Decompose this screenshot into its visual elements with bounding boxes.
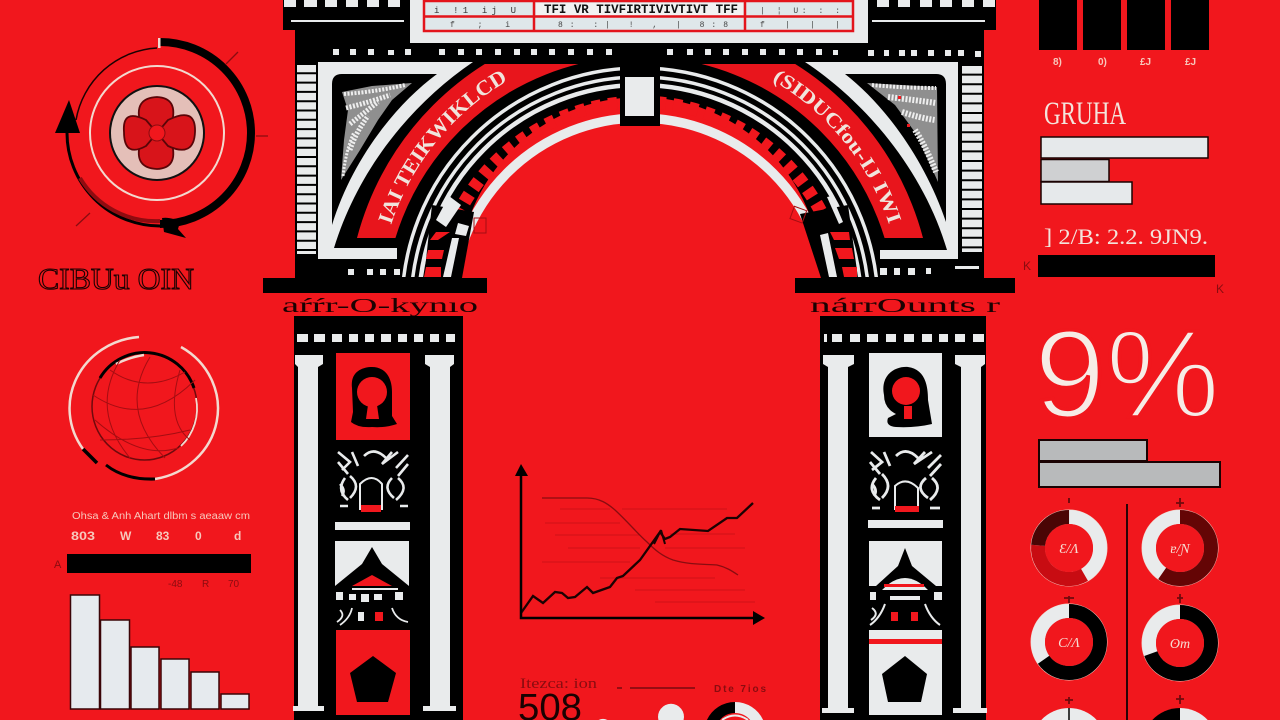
keystone	[620, 66, 660, 126]
donut 4: ʘm	[1170, 637, 1190, 652]
donut 2	[1142, 498, 1218, 586]
black scale bar	[67, 554, 251, 573]
bar axis marks	[54, 559, 240, 590]
panel: ornament right	[870, 451, 941, 512]
inscription table	[410, 0, 868, 43]
columns left	[293, 355, 456, 711]
attic crenels left	[284, 0, 404, 22]
scale labels	[71, 529, 241, 543]
tick marks: K	[1216, 282, 1224, 296]
grey comparison bars	[1039, 440, 1220, 487]
inscription table: f ; i	[450, 21, 510, 30]
tick marks	[76, 52, 268, 226]
pier inscription left: aŕŕr-O-kynıo	[282, 295, 478, 317]
panel caption: ] 2/B: 2.2. 9JN9.	[1044, 224, 1208, 249]
descending bar chart	[70, 595, 249, 709]
white band left	[335, 522, 410, 530]
bottom center stats	[518, 676, 766, 720]
bar axis marks: A	[54, 559, 62, 571]
black bar	[1038, 255, 1215, 277]
scale labels: 803	[71, 529, 95, 543]
scale labels: W	[120, 529, 132, 543]
scale labels: d	[234, 529, 241, 543]
panel: ornament left	[338, 451, 408, 512]
cycle diagram	[38, 38, 268, 296]
arch break blocks right	[790, 196, 858, 278]
right stripe column	[962, 66, 982, 252]
pier inscription right: nárrOunts r	[810, 295, 1001, 317]
panel: portrait left	[336, 353, 410, 440]
white band right	[868, 520, 943, 528]
tick marks	[1023, 259, 1224, 296]
left pier	[282, 295, 478, 720]
panel: temple right	[869, 541, 942, 630]
bar labels	[1053, 57, 1196, 68]
globe diagram	[54, 337, 251, 709]
stat label: Itezca: ion	[520, 676, 598, 692]
donut 6	[1152, 695, 1208, 720]
arch body	[263, 0, 1015, 293]
curved band inscription right: (SIDUCfou-IJ IWI	[774, 72, 902, 224]
panel: temple left	[335, 541, 409, 628]
right spandrel	[805, 62, 958, 259]
leader label: Dte 7ios	[714, 684, 766, 695]
rising data line	[521, 503, 753, 613]
chart grid lines	[542, 509, 755, 602]
peak arrow	[654, 530, 665, 544]
curved band inscription left: IAI TEIKWIKLCD	[378, 72, 505, 224]
panel: portrait right	[869, 353, 942, 437]
scale labels: 0	[195, 529, 202, 543]
line chart	[515, 464, 765, 625]
donut grid	[1027, 498, 1218, 720]
arrowheads	[55, 100, 186, 238]
flower medallion	[110, 86, 204, 180]
cycle label: CIBUu OIN	[38, 261, 194, 296]
inscription table: 8: :| ! , | 8:8	[558, 21, 728, 30]
frieze dentils	[333, 49, 981, 57]
bar labels: £J	[1140, 57, 1151, 68]
left stripe column	[297, 65, 316, 254]
inscription table: f | | |	[760, 21, 840, 30]
pier body left	[294, 316, 463, 720]
small white dots	[599, 704, 684, 720]
red inscription band	[357, 64, 923, 238]
bottom donut	[707, 702, 763, 720]
pier dentils left	[297, 334, 455, 342]
panel: pentagon right	[869, 630, 942, 715]
axes	[515, 464, 765, 625]
bar labels: 0)	[1098, 57, 1107, 68]
attic crenels right	[872, 0, 995, 22]
donut divider	[1126, 504, 1128, 720]
bar axis marks: 70	[228, 579, 240, 590]
columns right	[822, 355, 987, 713]
scale labels: 83	[156, 529, 170, 543]
voussoirs	[458, 96, 826, 212]
globe sphere	[92, 353, 197, 460]
panel: pentagon left	[336, 630, 410, 715]
top bar chart	[1039, 0, 1209, 68]
pier body right	[820, 316, 986, 720]
arch break blocks left	[424, 196, 486, 278]
panel heading: GRUHA	[1044, 96, 1126, 132]
donut 2: ɐ/Ɲ	[1170, 542, 1190, 557]
trend curve	[542, 498, 738, 575]
left spandrel	[318, 62, 473, 259]
donut 1: Ɛ/Λ	[1059, 542, 1079, 557]
inscription table: i !1 ij U	[434, 6, 516, 16]
white bars	[1041, 137, 1208, 204]
black bars	[1039, 0, 1209, 50]
bar labels: 8)	[1053, 57, 1062, 68]
inscription table: | ¦ U: : :	[760, 7, 840, 16]
globe caption: Ohsa & Anh Ahart dlbm s aeaaw cm	[72, 511, 250, 522]
leader line	[617, 687, 695, 689]
bar labels: £J	[1185, 57, 1196, 68]
archivolt rings	[402, 67, 878, 277]
outer cycle arcs	[67, 38, 251, 226]
outer globe arcs	[70, 337, 218, 479]
donut 3	[1031, 596, 1107, 680]
triumphal arch	[263, 0, 1015, 720]
bar axis marks: R	[202, 579, 209, 590]
donut 3: C/Λ	[1058, 636, 1080, 651]
donut 5	[1041, 697, 1097, 720]
tick marks: K	[1023, 259, 1031, 273]
base dentils	[348, 266, 979, 275]
pier dentils right	[824, 334, 984, 342]
inner ring	[90, 66, 224, 200]
right pier	[810, 295, 1001, 720]
donut 1	[1027, 498, 1111, 590]
donut 4	[1142, 594, 1218, 681]
big percentage: 9%	[1034, 305, 1220, 444]
horizontal bars panel	[1023, 96, 1224, 296]
inscription table: TFI VR TIVFIRTIVIVTIVT TFF	[544, 2, 738, 17]
bar axis marks: -48	[168, 579, 183, 590]
